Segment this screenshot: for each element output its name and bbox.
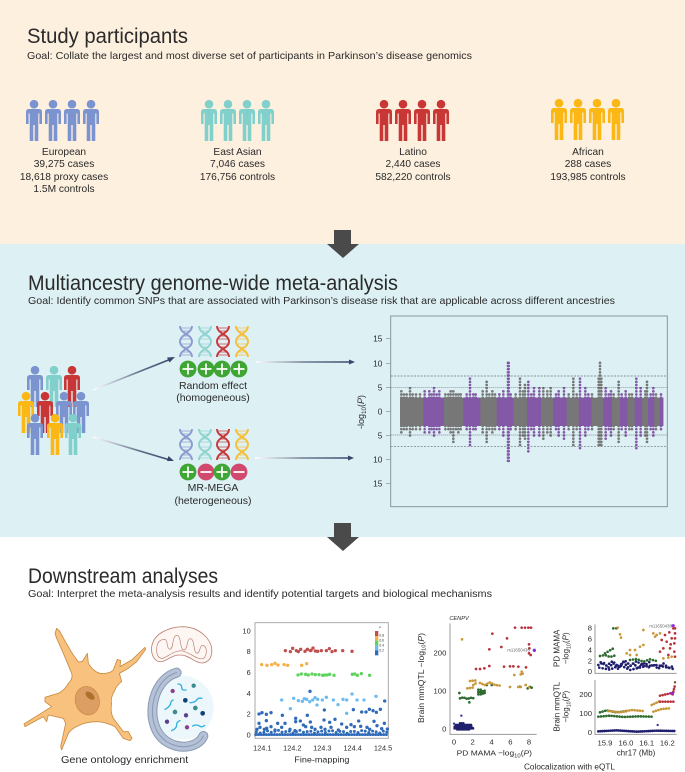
points: navy bottom	[598, 730, 675, 732]
group: MR-MEGA	[174, 429, 252, 507]
y axis labels: 10	[243, 626, 251, 635]
y axis title: top right: 10	[566, 643, 572, 649]
group: East Asian	[200, 100, 275, 183]
goal text: downstream analyses: Goal: Interpret the meta-analysis results and identify potential targets and biological mechanisms	[28, 588, 492, 600]
points: gold bottom	[608, 701, 670, 712]
y axis title: bottom right: (	[562, 698, 571, 701]
arrow: random effect to plot	[256, 360, 355, 364]
icon: African people	[551, 99, 624, 140]
label: European counts: 1.5M controls	[33, 184, 95, 195]
label: European counts	[20, 147, 108, 195]
x axis labels: 124.4	[343, 743, 362, 752]
axis labels: top right: 4	[588, 645, 593, 654]
points: red	[476, 628, 531, 669]
points: green bottom	[598, 710, 652, 717]
y axis ticks and labels: 5	[378, 382, 383, 392]
axis labels: left scatter: 0	[442, 725, 446, 734]
label: African counts	[550, 147, 626, 183]
group: Latino	[375, 100, 451, 183]
x axis title: left scatter: (	[521, 749, 524, 758]
icon: four DNA helices	[180, 326, 248, 357]
legend: r2	[375, 625, 384, 655]
group: random effect	[176, 326, 250, 404]
illustration: gene ontology enrichment	[24, 627, 214, 766]
icon: crowd of people	[18, 366, 89, 455]
axis labels: bottom right: 16.2	[660, 738, 675, 747]
group: European	[20, 100, 108, 195]
highlighted SNP: rs11650436	[507, 648, 530, 653]
panel: meta-analysis	[0, 244, 685, 537]
points: r2 0.4	[282, 694, 376, 713]
x axis title: left scatter: PD MAMA −log	[457, 749, 509, 758]
y axis labels	[243, 626, 251, 739]
axis labels: left scatter	[434, 648, 531, 747]
group: African	[550, 99, 626, 183]
icon: autolysosome	[150, 673, 214, 747]
x axis title: left scatter: 10	[514, 753, 521, 759]
points: navy	[455, 723, 473, 729]
label: random effect: (homogeneous)	[176, 392, 250, 404]
x axis labels	[253, 743, 392, 752]
y axis ticks and labels: 5	[378, 430, 383, 440]
goal text: meta-analysis: Goal: Identify common SNPs that are associated with Parkinson’s disease risk that are applicable across different ancestries	[28, 295, 615, 307]
y axis title: left scatter: Brain mmQTL −log	[416, 653, 426, 723]
legend: r2: 0.6	[379, 638, 384, 642]
y axis ticks and labels	[373, 334, 391, 488]
arrow: participants to meta-analysis	[327, 230, 359, 258]
title: CENPV: CENPV	[449, 616, 470, 622]
axis labels: top right: 8	[588, 624, 592, 633]
x axis labels: 124.2	[283, 743, 302, 752]
y axis ticks and labels: 10	[373, 454, 383, 464]
axis labels: bottom right: 16.0	[619, 738, 633, 747]
axis labels: bottom right: 15.9	[598, 738, 612, 747]
heading: downstream analyses: Downstream analyses	[28, 565, 218, 588]
y axis title: bottom right: P)	[562, 691, 571, 699]
axis labels: top right: 0	[588, 667, 592, 676]
axis labels: left scatter: 6	[508, 738, 512, 747]
y axis labels: 0	[247, 730, 251, 739]
axis labels: bottom right: 0	[588, 728, 592, 737]
axis labels: top right: 2	[588, 656, 592, 665]
y axis title: left scatter: 10	[422, 644, 428, 651]
panel: study participants	[0, 0, 685, 244]
y axis title: -log	[356, 414, 366, 429]
caption: colocalization with eQTL: Colocalization with eQTL	[524, 763, 616, 772]
label: East Asian counts	[200, 147, 275, 183]
panel: downstream analyses	[0, 537, 685, 772]
label: Latino counts: 582,220 controls	[375, 172, 451, 183]
points: purple chromosomes	[425, 362, 661, 463]
axis labels: top right: 6	[588, 635, 592, 644]
label: MR-MEGA: (heterogeneous)	[174, 495, 252, 507]
icon: East Asian people	[201, 100, 274, 141]
chart: fine-mapping	[243, 623, 392, 765]
y axis title: left scatter: (	[416, 641, 426, 644]
points: r2 0.8	[262, 663, 307, 665]
x axis labels: 124.1	[253, 743, 272, 752]
label: African counts: African	[572, 147, 604, 158]
y axis title: P)	[356, 395, 366, 404]
arrow: crowd to MR-MEGA	[93, 437, 174, 461]
label: random effect	[176, 380, 250, 404]
label: East Asian counts: 7,046 cases	[210, 159, 265, 170]
icon: plus signs	[180, 361, 247, 377]
axis labels: bottom right: 16.1	[639, 738, 654, 747]
points: green	[460, 688, 485, 699]
scatter: bottom right	[552, 680, 677, 758]
label: African counts: 193,985 controls	[550, 172, 626, 183]
label: random effect: Random effect	[179, 380, 247, 392]
axis labels: left scatter: 8	[527, 738, 531, 747]
y axis title: bottom right: 10	[566, 701, 572, 707]
label: Latino counts: 2,440 cases	[386, 159, 440, 170]
axis labels: left scatter: 200	[434, 648, 446, 657]
x axis labels: 124.3	[313, 743, 332, 752]
legend: r2: 0.8	[379, 634, 384, 638]
points: navy top	[598, 660, 675, 670]
points: red bottom	[660, 685, 675, 702]
y axis title: top right: P)	[562, 632, 571, 640]
points: r2 0.6	[298, 674, 370, 675]
axis labels: bottom right: 100	[579, 709, 592, 718]
y axis ticks and labels: 10	[373, 358, 383, 368]
legend: r2: 0.4	[379, 643, 384, 647]
icon: European people	[26, 100, 99, 141]
label: Latino counts: Latino	[399, 147, 427, 158]
arrow: MR-MEGA to plot	[255, 456, 354, 460]
scatter: left	[416, 616, 537, 759]
arrow: crowd to random effect	[93, 357, 175, 390]
points: low r2	[257, 691, 387, 731]
label: European counts: 18,618 proxy cases	[20, 172, 108, 183]
label: East Asian counts: East Asian	[213, 147, 262, 158]
points: gold top	[618, 628, 672, 658]
y axis ticks and labels: 0	[378, 406, 383, 416]
heading: study participants: Study participants	[27, 25, 188, 48]
axis labels: top right	[588, 624, 593, 676]
x axis title: bottom right: chr17 (Mb)	[617, 749, 656, 758]
y axis title: top right: PD MAMA	[552, 629, 561, 667]
legend: r2: r²	[379, 625, 382, 629]
icon: plus and minus signs	[180, 464, 247, 480]
goal text: study participants: Goal: Collate the largest and most diverse set of participants in Parkinson’s disease genomics	[27, 50, 472, 62]
axis labels: bottom right: 200	[579, 690, 592, 699]
band: gray and purple core	[400, 398, 663, 426]
icon: neuron	[24, 628, 146, 750]
axis labels: bottom right	[579, 690, 675, 747]
label: MR-MEGA	[174, 482, 252, 507]
y axis ticks and labels: 15	[373, 478, 383, 488]
y axis title: (	[356, 404, 366, 407]
y axis title: top right	[552, 629, 572, 667]
axis labels: left scatter: 4	[490, 738, 495, 747]
chart: Miami plot	[356, 316, 667, 507]
y axis labels: 6	[247, 668, 251, 677]
y axis labels: 8	[247, 647, 251, 656]
highlighted SNP top: rs11650436	[649, 623, 672, 628]
label: African counts: 288 cases	[565, 159, 611, 170]
label: European counts: 39,275 cases	[34, 159, 94, 170]
points: green top	[600, 628, 657, 662]
highlighted SNP bottom	[670, 692, 673, 695]
x axis labels: 124.5	[374, 743, 392, 752]
y axis title: top right: (	[562, 640, 571, 643]
axis labels: left scatter: 100	[434, 687, 446, 696]
chart: colocalization with eQTL	[416, 616, 677, 772]
axis labels: left scatter: 0	[452, 738, 456, 747]
arrow: meta-analysis to downstream	[327, 523, 359, 551]
icon: Latino people	[376, 100, 449, 141]
points: red top	[660, 626, 675, 657]
label: Latino counts	[375, 147, 451, 183]
y axis title: top right: −log	[562, 649, 571, 664]
legend: r2: 0.2	[379, 648, 384, 652]
label: MR-MEGA: MR-MEGA	[188, 482, 238, 494]
icon: mitochondrion	[152, 627, 212, 663]
y axis labels: 2	[247, 710, 251, 719]
y axis title: bottom right: −log	[562, 707, 571, 723]
y axis labels: 4	[247, 689, 251, 698]
scatter: top right	[552, 623, 677, 676]
x axis title: left scatter: P)	[524, 749, 532, 758]
y axis title: left scatter: P)	[416, 633, 426, 642]
axis labels: left scatter: 2	[471, 738, 475, 747]
y axis title: 10	[361, 407, 368, 414]
heading: meta-analysis: Multiancestry genome-wide meta-analysis	[28, 272, 398, 295]
y axis ticks and labels: 15	[373, 334, 383, 344]
label: European counts: European	[42, 147, 86, 158]
y axis title: bottom right: Brain mmQTL	[552, 681, 561, 732]
label: East Asian counts: 176,756 controls	[200, 172, 275, 183]
points: top r2	[285, 648, 352, 652]
caption: gene ontology enrichment: Gene ontology enrichment	[61, 755, 189, 766]
y axis title: bottom right	[552, 681, 572, 732]
points: gold	[467, 680, 501, 688]
caption: fine-mapping: Fine-mapping	[294, 755, 350, 765]
icon: four DNA helices lower	[180, 429, 248, 460]
points: gray chromosomes	[401, 361, 656, 446]
